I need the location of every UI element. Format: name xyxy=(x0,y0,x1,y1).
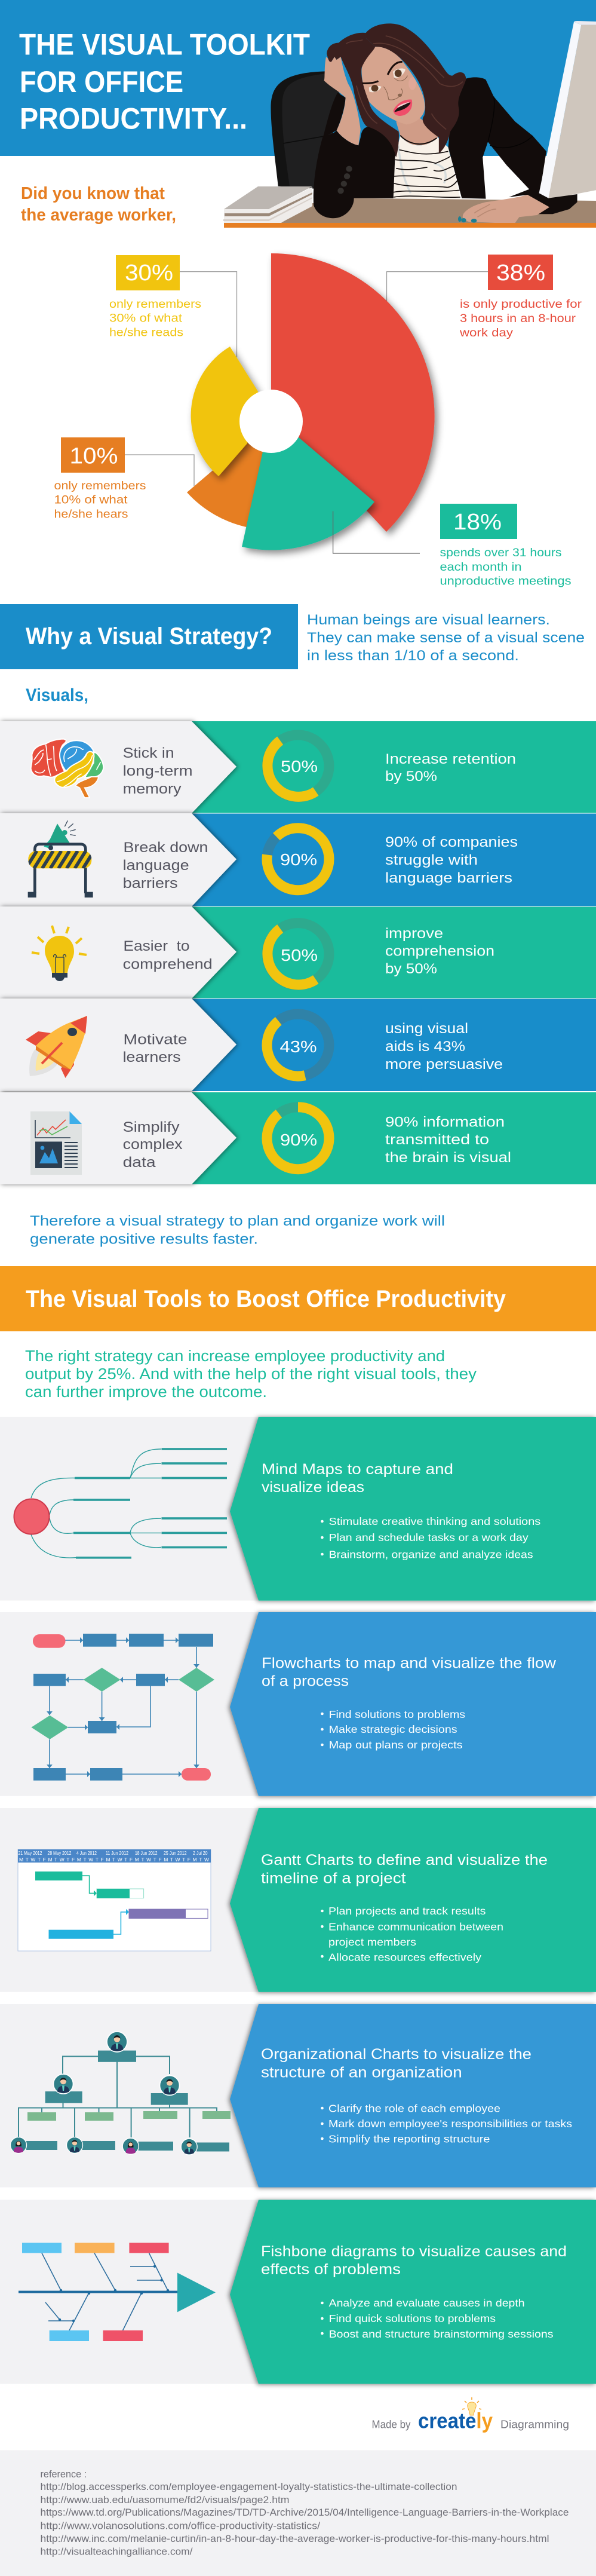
row 4 result text: using visual xyxy=(385,1021,468,1037)
footer: references: http://www.uab.edu/uasomume/fd2/visuals/page2.htm xyxy=(41,2494,289,2505)
row 2 result text: 90% of companies xyxy=(385,834,518,850)
callout: 10%: 10% xyxy=(69,444,118,469)
bullet list: Make strategic decisions xyxy=(329,1723,457,1735)
text: human beings are visual learners: in less than 1/10 of a second. xyxy=(307,648,519,664)
row 4 result text: aids is 43% xyxy=(385,1039,465,1055)
text: therefore a visual strategy: Therefore a visual strategy to plan and organize work will xyxy=(30,1213,445,1229)
row 3 label: Easier to xyxy=(123,938,190,954)
row 5 result text: transmitted to xyxy=(385,1132,489,1148)
footer: references: http://visualteachingalliance.com/ xyxy=(41,2546,193,2557)
title: PRODUCTIVITY... xyxy=(20,102,247,136)
gantt chart diagram: 4 Jun 2012 xyxy=(76,1850,97,1856)
bullet list: Allocate resources effectively xyxy=(328,1951,481,1963)
row 5 result text: 90% information xyxy=(385,1114,505,1131)
bullet list: Find solutions to problems xyxy=(329,1708,465,1720)
callout: 10%: only remembers xyxy=(54,480,146,492)
gantt chart diagram: 2 Jul 20 xyxy=(193,1850,208,1856)
donut: 50% comprehension: 50% xyxy=(281,946,318,964)
row 2 result text: struggle with xyxy=(385,852,478,868)
donut: 90% language barriers: 90% xyxy=(280,850,317,869)
title: THE VISUAL TOOLKIT xyxy=(19,28,310,62)
heading: the visual tools: The Visual Tools to Boost Office Productivity xyxy=(26,1286,506,1312)
bullet list: Simplify the reporting structure xyxy=(328,2133,490,2145)
row 5 result text xyxy=(385,1114,511,1166)
callout: 30%: 30% of what xyxy=(109,312,183,325)
donut: 43% persuasive: 43% xyxy=(279,1037,317,1056)
footer: references: http://www.volanosolutions.com/office-productivity-statistics/ xyxy=(41,2520,320,2532)
row 1 result text xyxy=(385,751,516,785)
text: the right strategy xyxy=(25,1348,477,1401)
callout: 30%: he/she reads xyxy=(109,326,183,339)
pie chart: worker statistics xyxy=(187,253,435,550)
footer: references: https://www.td.org/Publications/Magazines/TD/TD-Archive/2015/04/Intelligence-Language-Barriers-in-the-Workplace xyxy=(41,2507,569,2518)
callout: 38% xyxy=(459,255,582,339)
donut: 90% visual information xyxy=(267,1107,329,1169)
panel: flowcharts xyxy=(0,1612,596,1796)
title xyxy=(19,28,310,136)
text: human beings are visual learners: They can make sense of a visual scene xyxy=(307,630,585,646)
heading xyxy=(261,1852,548,1887)
gantt chart diagram: 11 Jun 2012 xyxy=(106,1850,128,1856)
row 2 label xyxy=(123,840,208,892)
footer: references: reference : xyxy=(41,2468,87,2480)
donut: 50% comprehension xyxy=(267,923,329,985)
heading xyxy=(261,2046,532,2081)
footer: references: http://blog.accessperks.com/employee-engagement-loyalty-statistics-the-ultimate-collection xyxy=(41,2481,457,2492)
heading: of a process xyxy=(262,1673,349,1690)
donut: 90% language barriers xyxy=(267,828,329,890)
credit: made by creately diagramming: Made by xyxy=(371,2419,411,2431)
bullet list: Find quick solutions to problems xyxy=(329,2312,496,2324)
row 2 label: Break down xyxy=(123,840,208,856)
row 2 label: barriers xyxy=(123,875,178,892)
callout: 18%: each month in xyxy=(440,561,522,574)
heading xyxy=(261,2243,567,2278)
illustration: stressed office worker at desk xyxy=(223,21,596,228)
credit: made by creately diagramming: Diagramming xyxy=(500,2419,569,2431)
donut: 50% retention xyxy=(267,735,329,797)
chevrons: row label panels xyxy=(0,721,236,1184)
bullet list xyxy=(321,2297,554,2340)
row 1 label: Stick in xyxy=(123,745,174,761)
gantt chart diagram: M T W T F M T W T F M T W T F M T W T F M T W T F M T W T F M T W xyxy=(19,1857,209,1863)
heading: Mind Maps to capture and xyxy=(262,1461,453,1478)
intro question: Did you know that xyxy=(21,184,165,203)
row 3 result text: by 50% xyxy=(385,961,437,977)
bullet list: Enhance communication between xyxy=(328,1920,503,1932)
row 3 result text: improve xyxy=(385,926,443,942)
callout: 38%: 3 hours in an 8-hour xyxy=(460,313,576,325)
row 4 result text: more persuasive xyxy=(385,1056,503,1073)
text: human beings are visual learners xyxy=(307,612,585,664)
heading: structure of an organization xyxy=(261,2064,462,2081)
credit: made by creately diagramming: creately xyxy=(418,2409,493,2433)
intro question: the average worker, xyxy=(21,206,176,225)
row 3 result text: comprehension xyxy=(385,943,494,960)
icon: creately bulb xyxy=(462,2397,481,2415)
mind map diagram xyxy=(14,1448,227,1559)
callout: 30%: 30% xyxy=(125,261,173,286)
bullet list: Boost and structure brainstorming sessions xyxy=(329,2328,554,2340)
callout: 18%: unproductive meetings xyxy=(440,575,571,588)
text: the right strategy: The right strategy can increase employee productivity and xyxy=(25,1348,445,1365)
row 5 label: complex xyxy=(123,1137,183,1153)
panel: fishbone diagrams xyxy=(0,2200,596,2384)
callout: 30%: only remembers xyxy=(109,298,201,311)
heading: effects of problems xyxy=(261,2261,401,2278)
bullet list xyxy=(321,1708,465,1751)
row 1 result text: by 50% xyxy=(385,768,437,785)
row 2 label: language xyxy=(123,857,189,874)
heading: why a visual strategy: Why a Visual Strategy? xyxy=(26,623,272,650)
row 4 result text xyxy=(385,1021,503,1073)
callout: 10% xyxy=(54,437,146,521)
gantt chart diagram: 28 May 2012 xyxy=(48,1850,72,1856)
row 4 label: Motivate xyxy=(123,1031,188,1048)
callout: 38%: 38% xyxy=(496,261,545,286)
heading: why a visual strategy xyxy=(0,604,298,669)
callout: 38%: is only productive for xyxy=(460,298,582,311)
donut: 90% visual information: 90% xyxy=(280,1131,317,1149)
icon: barrier with megaphone xyxy=(26,820,94,898)
text: therefore a visual strategy xyxy=(30,1213,445,1248)
connector line: 18% xyxy=(333,511,420,553)
icon: brain xyxy=(31,739,103,798)
icon: rocket xyxy=(26,1016,87,1078)
flowchart diagram xyxy=(31,1634,214,1781)
row 1 result text: Increase retention xyxy=(385,751,516,767)
row 3 result text xyxy=(385,926,494,977)
fishbone diagram xyxy=(19,2243,216,2341)
row 2 result text: language barriers xyxy=(385,870,512,886)
text: the right strategy: can further improve the outcome. xyxy=(25,1384,267,1401)
icon: document with chart xyxy=(30,1111,82,1175)
row 4 label xyxy=(123,1031,188,1065)
panel: mind maps xyxy=(0,1417,596,1601)
bullet list: Mark down employee's responsibilities or tasks xyxy=(328,2118,572,2130)
heading: timeline of a project xyxy=(261,1870,406,1887)
heading: the visual tools xyxy=(0,1266,596,1331)
bullet list: Brainstorm, organize and analyze ideas xyxy=(329,1549,533,1561)
bullet list: Clarify the role of each employee xyxy=(328,2102,500,2114)
heading: Gantt Charts to define and visualize the xyxy=(261,1852,548,1869)
gantt chart diagram: 25 Jun 2012 xyxy=(164,1850,187,1856)
gantt chart diagram xyxy=(18,1849,211,1951)
heading xyxy=(262,1655,557,1690)
bullet list xyxy=(321,1515,540,1561)
donut: 50% retention: 50% xyxy=(281,757,318,776)
title: FOR OFFICE xyxy=(20,65,183,99)
row 5 label: data xyxy=(123,1154,156,1171)
footer: references: http://www.inc.com/melanie-curtin/in-an-8-hour-day-the-average-worker-is-productive-for-this-many-hours.html xyxy=(41,2533,549,2544)
bullet list xyxy=(321,1905,503,1963)
heading: Organizational Charts to visualize the xyxy=(261,2046,532,2063)
row 1 label: long-term xyxy=(123,763,193,779)
callout: 18%: spends over 31 hours xyxy=(440,547,561,559)
heading: Flowcharts to map and visualize the flow xyxy=(262,1655,557,1672)
header banner xyxy=(0,0,596,156)
callout: 10%: 10% of what xyxy=(54,494,128,507)
bullet list: Stimulate creative thinking and solutions xyxy=(329,1515,540,1527)
text: human beings are visual learners: Human beings are visual learners. xyxy=(307,612,550,628)
row 5 result text: the brain is visual xyxy=(385,1150,511,1166)
bullet list xyxy=(321,2102,572,2145)
row 4 label: learners xyxy=(123,1049,181,1065)
bullet list: project members xyxy=(328,1936,416,1948)
heading: Fishbone diagrams to visualize causes and xyxy=(261,2243,567,2260)
callout: 18% xyxy=(440,504,571,588)
panel: gantt charts xyxy=(0,1808,596,1992)
donut: 43% persuasive xyxy=(267,1014,329,1076)
gantt chart diagram: 21 May 2012 xyxy=(18,1850,42,1856)
text: therefore a visual strategy: generate positive results faster. xyxy=(30,1232,258,1248)
callout: 38%: work day xyxy=(459,327,514,339)
icon: light bulb xyxy=(32,926,87,981)
heading: visualize ideas xyxy=(262,1479,364,1496)
row 5 label xyxy=(123,1119,183,1171)
gantt chart diagram: 18 Jun 2012 xyxy=(135,1850,158,1856)
credit: made by creately diagramming xyxy=(371,2397,569,2433)
bullet list: Analyze and evaluate causes in depth xyxy=(329,2297,525,2309)
bullet list: Map out plans or projects xyxy=(329,1739,463,1751)
intro question xyxy=(21,184,176,225)
panel: organizational charts xyxy=(0,2004,596,2187)
coloured row backgrounds xyxy=(0,721,596,1184)
row 2 result text xyxy=(385,834,518,886)
callout connector lines xyxy=(125,272,488,486)
callout: 10%: he/she hears xyxy=(54,508,128,521)
row 3 label xyxy=(123,938,213,973)
bullet list: Plan projects and track results xyxy=(328,1905,486,1917)
text: the right strategy: output by 25%. And with the help of the right visual tools, they xyxy=(25,1366,477,1383)
heading xyxy=(262,1461,453,1496)
bullet list: Plan and schedule tasks or a work day xyxy=(329,1531,529,1543)
row 1 label: memory xyxy=(123,781,182,797)
subheading: visuals: Visuals, xyxy=(26,685,88,705)
footer: references xyxy=(0,2450,596,2576)
org chart diagram xyxy=(11,2032,231,2155)
row 3 label: comprehend xyxy=(123,956,213,973)
row 1 label xyxy=(123,745,193,797)
row 5 label: Simplify xyxy=(123,1119,180,1135)
callout: 30% xyxy=(109,255,201,339)
callout: 18%: 18% xyxy=(453,510,502,535)
